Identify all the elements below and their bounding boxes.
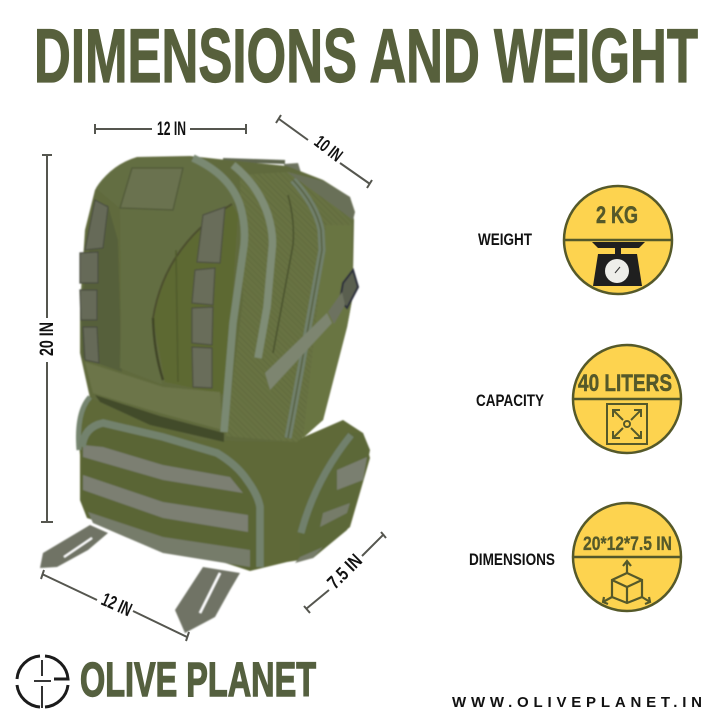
website: WWW.OLIVEPLANET.IN: [452, 694, 702, 711]
backpack: pocket fold shadow: [176, 250, 178, 382]
backpack: pocket zipper: [82, 423, 260, 567]
icon: cube with arrows: [603, 561, 650, 604]
icon: expand box: [607, 404, 647, 444]
dimension: top width 12 in: [95, 119, 246, 140]
backpack: front pocket: [80, 423, 260, 570]
dimension: depth 10 in: [276, 115, 372, 188]
backpack: side panel hatch: [226, 172, 352, 442]
dimension: bottom width 12 in: [41, 570, 189, 641]
backpack photo illustration: [40, 156, 370, 633]
badge: capacity: 40 LITERS: [578, 370, 672, 397]
label: capacity: CAPACITY: [476, 391, 545, 410]
icon: scale: [592, 242, 645, 286]
backpack: left inner panel: [81, 205, 122, 372]
backpack: velcro patch top: [120, 168, 183, 210]
backpack: upper body: [80, 156, 354, 442]
label: weight: WEIGHT: [478, 230, 532, 249]
badge: dimensions: [573, 503, 681, 611]
dimension: top width 12 in: 12 IN: [157, 119, 186, 140]
logo: [17, 654, 316, 708]
dimension: height 20 in: 20 IN: [37, 322, 58, 356]
backpack: shoulder strap and buckle: [265, 313, 332, 390]
backpack: side pocket: [300, 433, 370, 558]
backpack: webbing centre: [192, 207, 225, 388]
icon: crosshair: [17, 656, 68, 708]
dimension: bottom width 12 in: 12 IN: [98, 589, 135, 621]
backpack: mesh pocket: [153, 204, 238, 395]
dimension: bottom depth 7.5 in: 7.5 IN: [324, 550, 367, 594]
badge: dimensions: 20*12*7.5 IN: [583, 534, 672, 555]
dimension: bottom depth 7.5 in: [304, 532, 386, 613]
label: dimensions: DIMENSIONS: [469, 550, 555, 569]
backpack: lower left zipper: [78, 397, 90, 450]
backpack: main zippers: [193, 158, 244, 432]
dimension: height 20 in: [37, 155, 58, 522]
backpack: webbing left: [80, 200, 108, 363]
backpack: top flap: [287, 172, 355, 220]
logo wordmark: OLIVE PLANET: [80, 654, 316, 707]
backpack: top handle: [223, 160, 302, 176]
backpack: velcro panel bottom: [85, 362, 223, 430]
backpack: left foot strap: [40, 525, 108, 568]
backpack: seam: [273, 195, 293, 353]
backpack: lower body: [77, 396, 370, 571]
badge: capacity: [573, 345, 681, 453]
dimension: depth 10 in: 10 IN: [311, 131, 346, 166]
badge: weight: 2 KG: [596, 202, 638, 229]
backpack: shadow under velcro: [95, 395, 224, 442]
backpack: centre front panel: [96, 158, 238, 384]
backpack: right foot strap: [175, 567, 240, 633]
backpack: molle straps: [83, 445, 243, 493]
backpack: right side panel: [303, 225, 352, 438]
badge: weight: [564, 186, 672, 294]
